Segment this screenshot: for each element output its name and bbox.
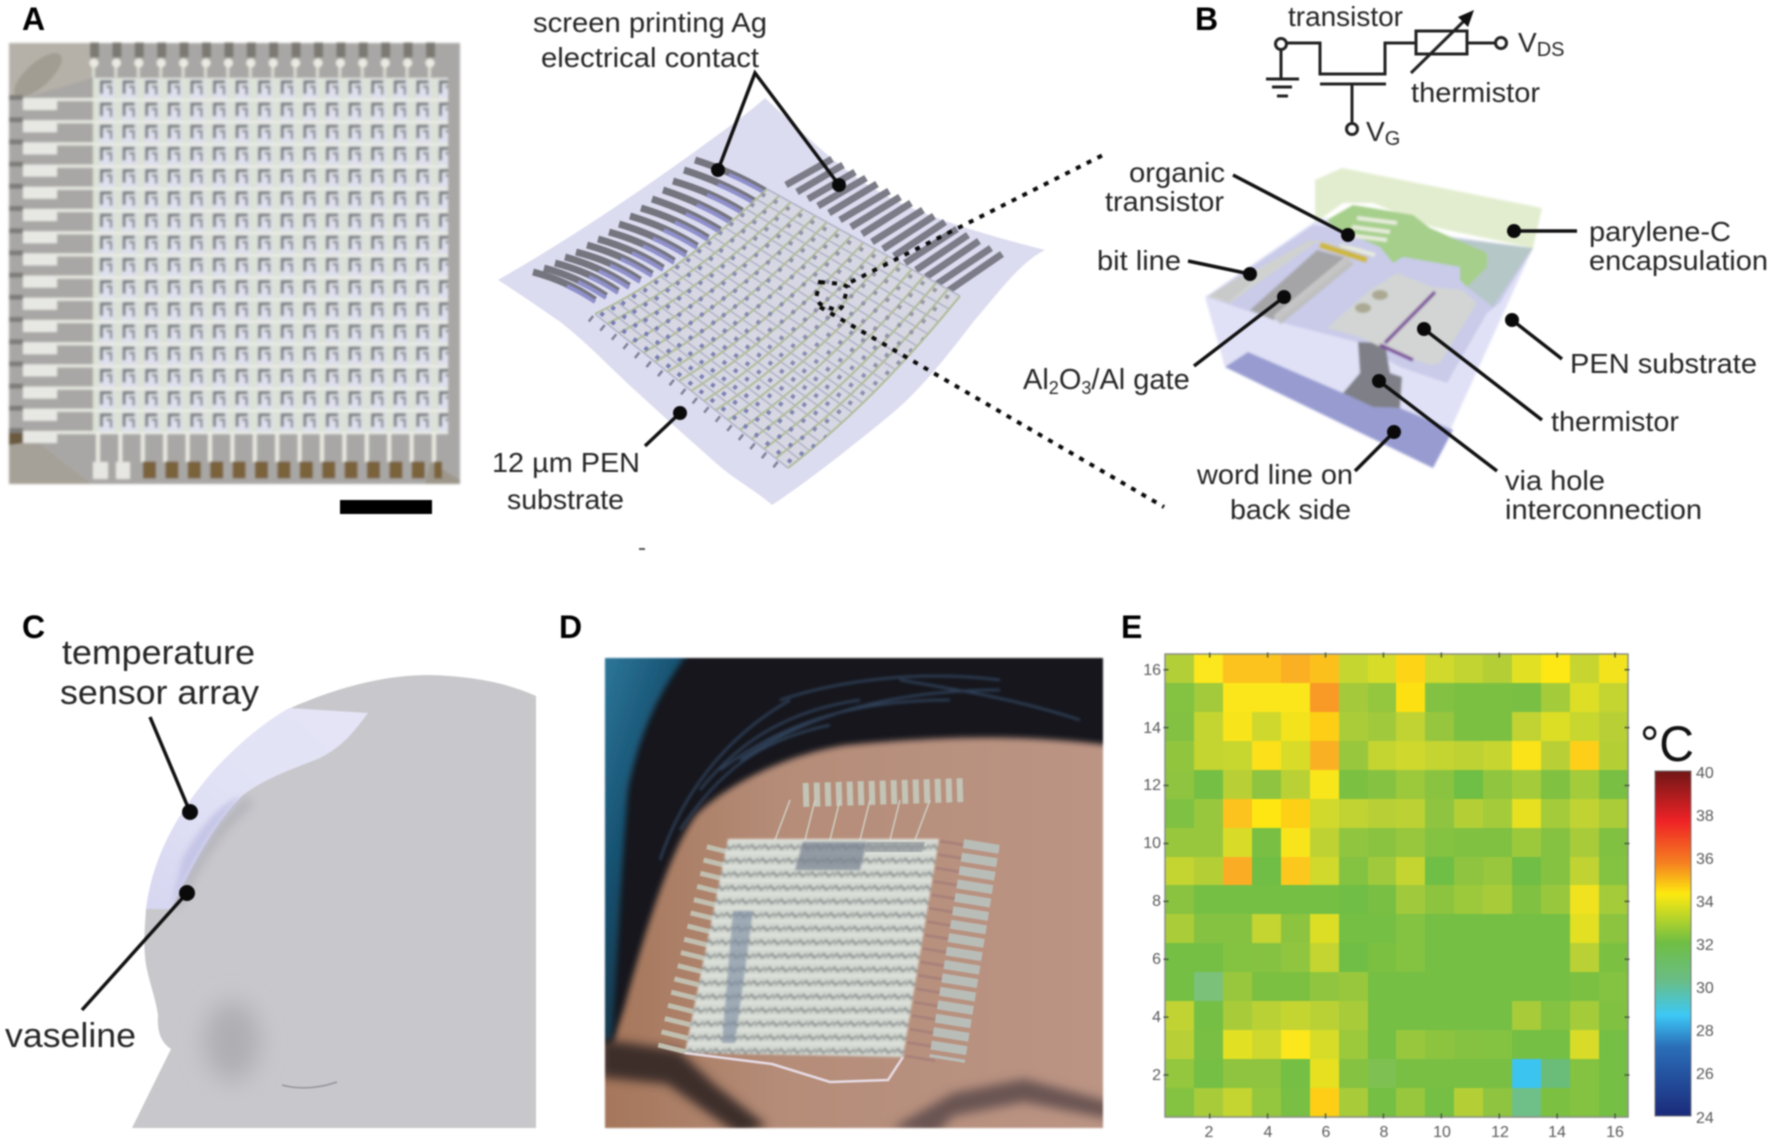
callout: word line on back side: word line on [1196, 459, 1353, 490]
heat map y axis labels: 6 [1152, 951, 1161, 968]
head silhouette [132, 675, 536, 1128]
panel A: sensor array photograph [8, 1, 460, 514]
label: 12 µm PEN substrate: 12 µm PEN [492, 447, 640, 478]
callout: temperature sensor array: sensor array [60, 674, 259, 712]
colour bar: 40 [1696, 765, 1714, 782]
circuit schematic [1266, 1, 1564, 150]
panel A: substrate sheet illustration [492, 7, 1164, 550]
heat map y axis labels: 12 [1143, 777, 1161, 794]
label D: D [559, 609, 582, 645]
label C: C [22, 609, 45, 645]
label: 12 µm PEN substrate [492, 447, 640, 515]
nose and brow shading [175, 800, 337, 1088]
callout: temperature sensor array [60, 634, 259, 820]
forehead photo [603, 656, 1105, 1130]
leader: PEN substrate [645, 406, 687, 446]
callout: via hole interconnection: interconnection [1505, 494, 1702, 525]
callout: temperature sensor array: temperature [62, 634, 255, 672]
callout: vaseline [5, 885, 195, 1055]
callout: PEN substrate: PEN substrate [1570, 348, 1757, 379]
label: screen printing Ag electrical contact [533, 7, 767, 73]
label B: B [1195, 1, 1218, 37]
callout: Al2O3/Al gate: Al [1023, 364, 1049, 396]
heat map x axis labels: 16 [1606, 1124, 1624, 1141]
colour bar: 32 [1696, 937, 1714, 954]
heat map cells [1165, 654, 1629, 1118]
scale bar [340, 500, 432, 514]
heat map x axis labels: 10 [1433, 1124, 1451, 1141]
panel C: head model with sensor [5, 609, 536, 1128]
label A: A [22, 1, 45, 37]
callout: parylene-C encapsulation: parylene-C [1589, 216, 1731, 247]
callout: parylene-C encapsulation: encapsulation [1589, 245, 1768, 276]
sensor array on skin [672, 790, 982, 1082]
colour bar [1655, 765, 1714, 1127]
heat map x axis labels: 12 [1491, 1124, 1509, 1141]
unit: degrees Celsius: °C [1640, 716, 1694, 772]
callout: thermistor: thermistor [1551, 406, 1679, 437]
colour bar: 26 [1696, 1066, 1714, 1083]
heat map x axis labels: 14 [1548, 1124, 1566, 1141]
panel D: sensor on forehead photo [559, 609, 1110, 1135]
colour bar: 30 [1696, 980, 1714, 997]
heat map y axis labels: 10 [1143, 835, 1161, 852]
sensor grid [590, 189, 960, 472]
heat map y axis labels [1143, 662, 1161, 1084]
callout: Al2O3/Al gate: /Al gate [1091, 364, 1190, 396]
heat map y axis labels: 2 [1152, 1067, 1161, 1084]
circuit schematic: thermistor [1411, 77, 1540, 108]
callout: Al2O3/Al gate: 3 [1081, 378, 1091, 398]
callout: parylene-C encapsulation [1507, 216, 1768, 276]
callout: organic transistor [1105, 157, 1355, 242]
circuit schematic: transistor [1288, 1, 1403, 32]
callout: Al2O3/Al gate [1023, 290, 1291, 398]
heat map x axis labels: 2 [1205, 1124, 1214, 1141]
heat map x axis labels [1205, 1124, 1624, 1141]
callout: word line on back side: back side [1230, 494, 1351, 525]
label: screen printing Ag electrical contact: electrical contact [541, 42, 759, 73]
PEN sheet [498, 98, 1045, 505]
circuit schematic: V [1366, 116, 1385, 147]
label E: E [1121, 609, 1142, 645]
leader: Ag contact [711, 73, 846, 192]
heat map y axis labels: 16 [1143, 662, 1161, 679]
heat map x axis labels: 4 [1264, 1124, 1273, 1141]
circuit schematic: DS [1537, 39, 1564, 61]
colour bar: 36 [1696, 851, 1714, 868]
label: 12 µm PEN substrate: substrate [507, 484, 624, 515]
label: screen printing Ag electrical contact: screen printing Ag [533, 7, 767, 38]
heat map x axis labels: 8 [1380, 1124, 1389, 1141]
callout: via hole interconnection [1372, 374, 1702, 525]
circuit schematic: V [1518, 27, 1537, 58]
callout: Al2O3/Al gate: O [1059, 364, 1081, 396]
callout: thermistor [1417, 322, 1679, 437]
panel B: circuit and device cross-section [1023, 1, 1768, 525]
heat map y axis labels: 14 [1143, 720, 1161, 737]
callout: bit line: bit line [1097, 245, 1181, 276]
contact pads: right group [786, 159, 1002, 291]
callout: word line on back side [1196, 425, 1401, 525]
callout: Al2O3/Al gate: 2 [1049, 378, 1059, 398]
callout: PEN substrate [1505, 313, 1757, 379]
device 3D drawing [1205, 168, 1542, 468]
colour bar: 38 [1696, 808, 1714, 825]
callout: vaseline: vaseline [5, 1017, 136, 1055]
heat map y axis labels: 4 [1152, 1009, 1161, 1026]
colour bar: 28 [1696, 1023, 1714, 1040]
colour bar: 34 [1696, 894, 1714, 911]
panel E: temperature heat map [1121, 609, 1714, 1141]
sensor film on forehead [146, 708, 368, 909]
photo: array on substrate [8, 43, 460, 484]
circuit schematic: G [1385, 128, 1400, 150]
callout: bit line [1097, 245, 1257, 281]
heat map y axis labels: 8 [1152, 893, 1161, 910]
callout: via hole interconnection: via hole [1505, 465, 1605, 496]
contact pads: left group [533, 160, 765, 302]
colour bar: 24 [1696, 1110, 1714, 1127]
heat map x axis labels: 6 [1322, 1124, 1331, 1141]
zoom selection with dashed lines to panel B [816, 155, 1164, 507]
callout: organic transistor: organic [1129, 157, 1225, 188]
callout: organic transistor: transistor [1105, 186, 1224, 217]
